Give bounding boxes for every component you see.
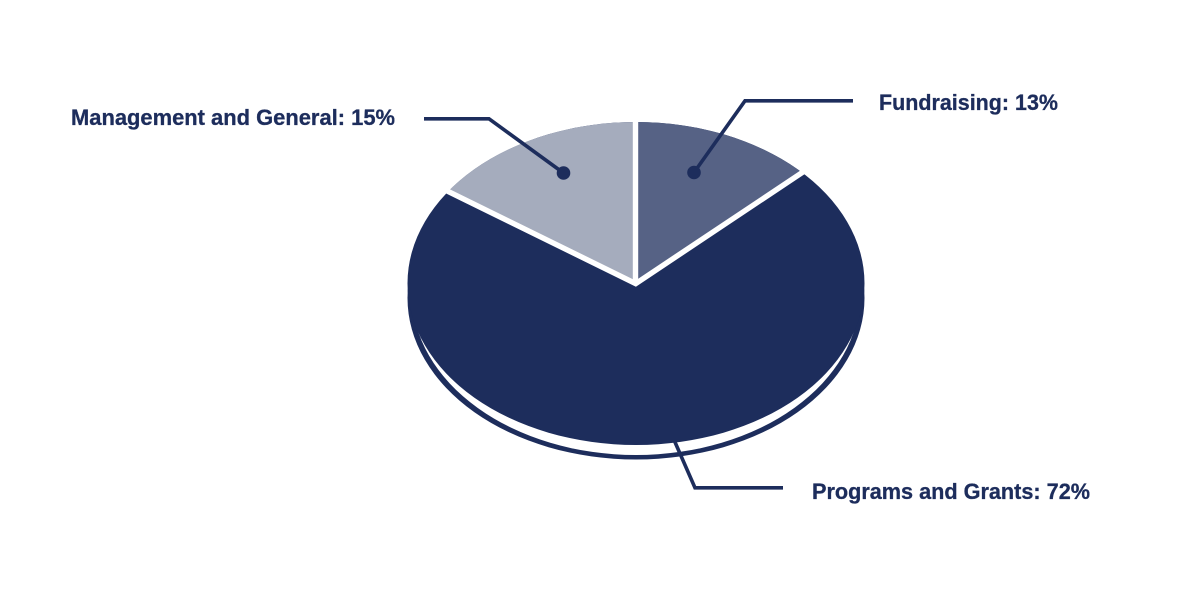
leader: Fundraising (687, 101, 853, 179)
label: Fundraising: Fundraising: 13% (879, 90, 1058, 115)
pie chart (408, 118, 864, 460)
segment: Programs and Grants 72% (408, 122, 864, 445)
segment: Management and General 15% (448, 122, 636, 284)
segment dividers (444, 118, 806, 284)
segment: Fundraising 13% (636, 122, 802, 284)
leader: Management and General (424, 119, 570, 180)
label: Management and General: Management and General: 15% (71, 105, 395, 130)
pie base rim (408, 136, 864, 460)
leader: Programs and Grants (674, 441, 783, 488)
rim white gap (412, 133, 860, 455)
label: Programs and Grants: Programs and Grants: 72% (812, 479, 1090, 504)
